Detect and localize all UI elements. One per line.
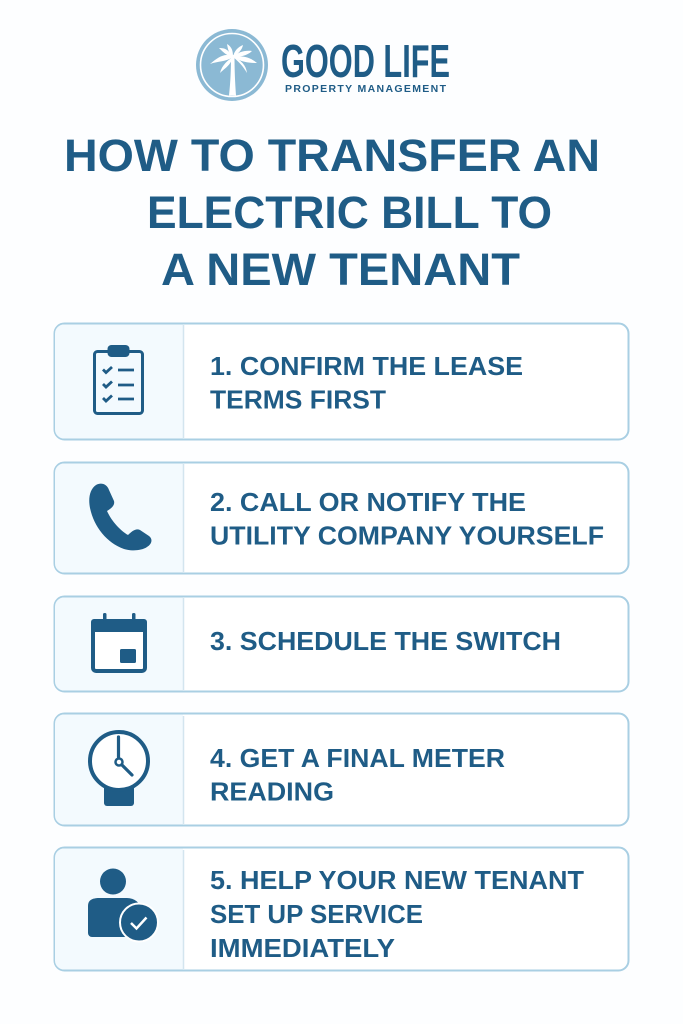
step text (210, 865, 584, 963)
icon: telephone (89, 484, 151, 550)
step text (210, 351, 523, 414)
step text: 1. CONFIRM THE LEASE (210, 351, 523, 381)
step text: 2. CALL OR NOTIFY THE (210, 487, 526, 517)
step text: SET UP SERVICE (210, 899, 423, 929)
step text: UTILITY COMPANY YOURSELF (210, 520, 604, 550)
icon: palm tree badge (196, 29, 268, 101)
icon: meter clock (90, 732, 148, 806)
step text: 5. HELP YOUR NEW TENANT (210, 865, 584, 895)
panel: step 3 (54, 596, 628, 692)
step text (210, 487, 604, 550)
panel: step 5 (54, 848, 628, 970)
step text: TERMS FIRST (210, 384, 386, 414)
panel: step 1 (54, 324, 628, 440)
step text: 3. SCHEDULE THE SWITCH (210, 626, 561, 656)
title: A NEW TENANT (161, 244, 520, 295)
title (64, 130, 600, 295)
logo (196, 29, 450, 101)
panel: step 2 (54, 462, 628, 574)
panel: step 4 (54, 714, 628, 826)
brand name: GOOD LIFE (281, 35, 450, 87)
step text (210, 743, 505, 806)
step text: 4. GET A FINAL METER (210, 743, 505, 773)
title: ELECTRIC BILL TO (147, 187, 552, 238)
step text: IMMEDIATELY (210, 933, 395, 963)
icon: clipboard checklist (94, 345, 142, 414)
icon: calendar (91, 613, 147, 671)
brand tagline: PROPERTY MANAGEMENT (285, 83, 447, 95)
title: HOW TO TRANSFER AN (64, 130, 600, 181)
step text: READING (210, 776, 334, 806)
icon: person with check (88, 868, 158, 942)
